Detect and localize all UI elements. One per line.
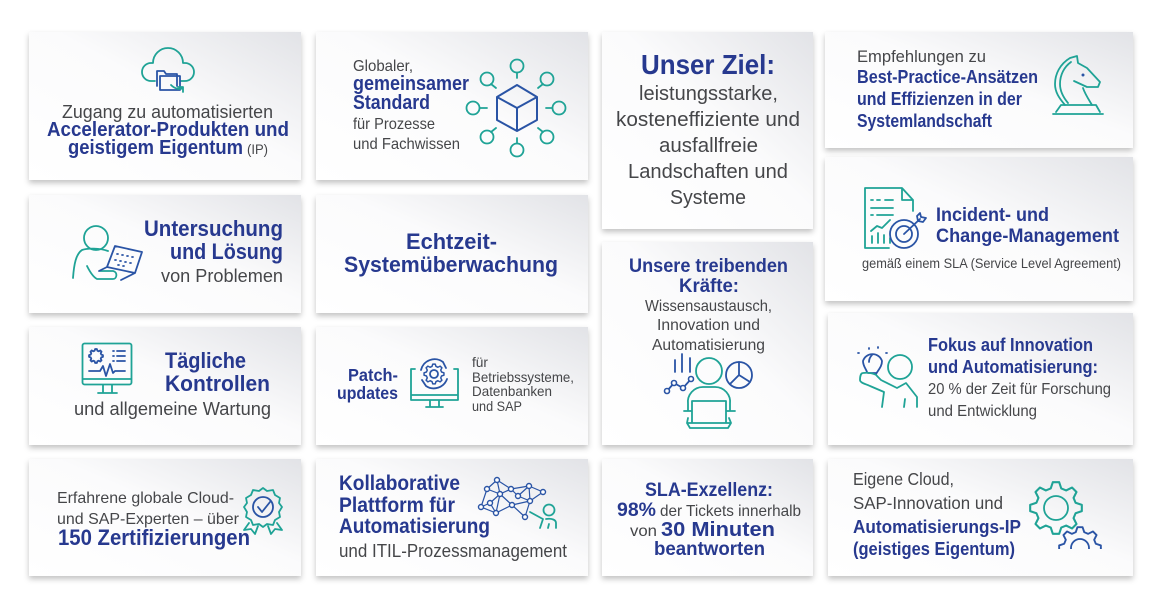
text: treibenden Kräfte: Unsere treibenden (629, 256, 788, 277)
panel: Unsere treibenden Kräfte (602, 242, 813, 445)
text: Tägliche Kontrollen (74, 348, 271, 419)
text: SLA-Exzellenz: beantworten (654, 539, 765, 560)
panel: Unser Ziel (602, 32, 813, 229)
text: SLA-Exzellenz: 30 Minuten (661, 518, 775, 541)
panel: Incident- und Change-Management (825, 157, 1133, 301)
text: Empfehlungen: und Effizienzen in der (857, 89, 1022, 109)
text: treibenden Kräfte: Wissensaustausch, (645, 298, 772, 315)
panel: Eigene Cloud (828, 459, 1133, 576)
text: Zertifizierungen (57, 490, 250, 550)
text: Unser Ziel: ausfallfreie (659, 135, 758, 157)
text: Empfehlungen: Systemlandschaft (857, 111, 992, 131)
text: Eigene Cloud: Eigene Cloud, (853, 469, 954, 489)
text: SLA-Exzellenz (617, 480, 801, 560)
text: Kollaborative Plattform: Kollaborative (339, 472, 460, 495)
text: Untersuchung (144, 216, 283, 286)
text: Untersuchung: und Lösung (170, 239, 283, 264)
text: Eigene Cloud: Automatisierungs-IP (853, 516, 1021, 537)
panel: Echtzeit-Systemüberwachung (316, 195, 588, 313)
text: Untersuchung: Untersuchung (144, 216, 283, 241)
panel: Patch-updates (316, 327, 588, 445)
text: treibenden Kräfte: Automatisierung (652, 337, 765, 354)
text: treibenden Kräfte (629, 256, 788, 354)
text: Zugang: geistigem Eigentum (68, 136, 243, 159)
text: Incident: gemäß einem SLA (Service Level Agreement) (862, 256, 1121, 271)
text: Echtzeit (344, 229, 558, 277)
text: Zertifizierungen: und SAP-Experten – über (57, 511, 240, 528)
text: Betriebssysteme: Datenbanken (472, 383, 552, 399)
panel: Untersuchung (29, 195, 301, 313)
text: Globaler Standard: Standard (353, 92, 430, 114)
text: Zugang: (IP) (247, 141, 268, 157)
text: Incident: Incident- und (936, 205, 1049, 226)
text: Echtzeit: Systemüberwachung (344, 252, 558, 277)
panel: Fokus auf Innovation (828, 313, 1133, 445)
text: Unser Ziel: leistungsstarke, (639, 83, 778, 105)
text: Betriebssysteme: für (472, 354, 488, 370)
text: SLA-Exzellenz: 98% (617, 500, 656, 521)
panel: SLA-Exzellenz (602, 459, 813, 576)
text: Unser Ziel: kosteneffiziente und (616, 109, 800, 131)
text: Kollaborative Plattform: Automatisierung (339, 515, 490, 538)
text: Incident (862, 205, 1121, 271)
text: Unser Ziel: Unser Ziel: (641, 49, 775, 80)
text: Echtzeit: Echtzeit- (406, 229, 497, 254)
text: Patch-updates: Patch- (348, 365, 398, 385)
text: Zugang (47, 102, 289, 159)
text: Untersuchung: von Problemen (161, 266, 283, 286)
text: Fokus: und Automatisierung: (928, 357, 1098, 377)
text: Globaler Standard: gemeinsamer (353, 73, 469, 95)
text: Eigene Cloud (853, 469, 1021, 559)
text: Zertifizierungen: Erfahrene globale Cloud- (57, 490, 234, 507)
text: treibenden Kräfte: Kräfte: (679, 276, 739, 297)
text: SLA-Exzellenz: SLA-Exzellenz: (645, 480, 773, 501)
text: Incident: Change-Management (936, 226, 1120, 247)
icon: award badge (244, 488, 282, 534)
text: Globaler Standard: und Fachwissen (353, 136, 460, 153)
text: Empfehlungen (857, 47, 1038, 131)
text: Tägliche Kontrollen: Kontrollen (165, 371, 270, 396)
text: Betriebssysteme: und SAP (472, 398, 522, 414)
text: Tägliche Kontrollen: Tägliche (165, 348, 246, 373)
text: Eigene Cloud: SAP-Innovation und (853, 493, 1003, 513)
panel: Accelerator-Produkte (29, 32, 301, 180)
icon: network with person (478, 478, 556, 528)
text: Empfehlungen: Best-Practice-Ansätzen (857, 67, 1038, 87)
panel: Kollaborative Plattform (316, 459, 588, 576)
text: treibenden Kräfte: Innovation und (657, 317, 760, 334)
text: Zugang: Accelerator-Produkten und (47, 118, 289, 141)
icon: gears (1029, 481, 1102, 549)
text: Eigene Cloud: (geistiges Eigentum) (853, 538, 1015, 559)
text: Kollaborative Plattform: Plattform für (339, 494, 455, 517)
icon: monitor with gear (411, 359, 458, 407)
text: Zugang: Zugang zu automatisierten (62, 102, 273, 122)
icon: person with laptop and charts (664, 354, 752, 428)
text: Patch-updates: updates (337, 383, 398, 403)
icon: person with laptop (73, 226, 142, 280)
panel: Globaler Standard (316, 32, 588, 180)
panel: Zertifizierungen (29, 459, 301, 576)
text: Empfehlungen: Empfehlungen zu (857, 47, 986, 66)
icon: document with target (865, 188, 926, 248)
icon: monitor with gear and pulse (82, 344, 132, 393)
text: Kollaborative Plattform (339, 472, 567, 561)
text: Globaler Standard: Globaler, (353, 58, 413, 75)
text: SLA-Exzellenz: von (630, 523, 657, 540)
text: Unser Ziel: Landschaften und (628, 161, 788, 183)
text: Unser Ziel: Systeme (670, 187, 746, 209)
icon: cloud with folder (142, 48, 194, 92)
text: Betriebssysteme: Betriebssysteme, (472, 369, 574, 385)
icon: cube with nodes (466, 60, 566, 156)
text: Fokus: Fokus auf Innovation (928, 335, 1093, 355)
panel: Empfehlungen (825, 32, 1133, 148)
panel: Tägliche Kontrollen (29, 327, 301, 445)
text: Tägliche Kontrollen: und allgemeine Wartung (74, 399, 271, 419)
text: Betriebssysteme (472, 354, 574, 414)
text: Zertifizierungen: 150 Zertifizierungen (58, 525, 250, 550)
text: SLA-Exzellenz: der Tickets innerhalb (660, 503, 801, 520)
text: Globaler Standard: für Prozesse (353, 116, 435, 133)
text: Globaler Standard (353, 58, 469, 153)
icon: person with light bulb (858, 347, 917, 407)
text: Patch-updates (337, 365, 398, 403)
text: Unser Ziel (616, 49, 800, 209)
text: Fokus: und Entwicklung (928, 403, 1037, 420)
icon: chess knight (1053, 56, 1103, 114)
text: Kollaborative Plattform: und ITIL-Prozessmanagement (339, 541, 567, 561)
text: Fokus (928, 335, 1111, 420)
text: Fokus: 20 % der Zeit für Forschung (928, 381, 1111, 398)
